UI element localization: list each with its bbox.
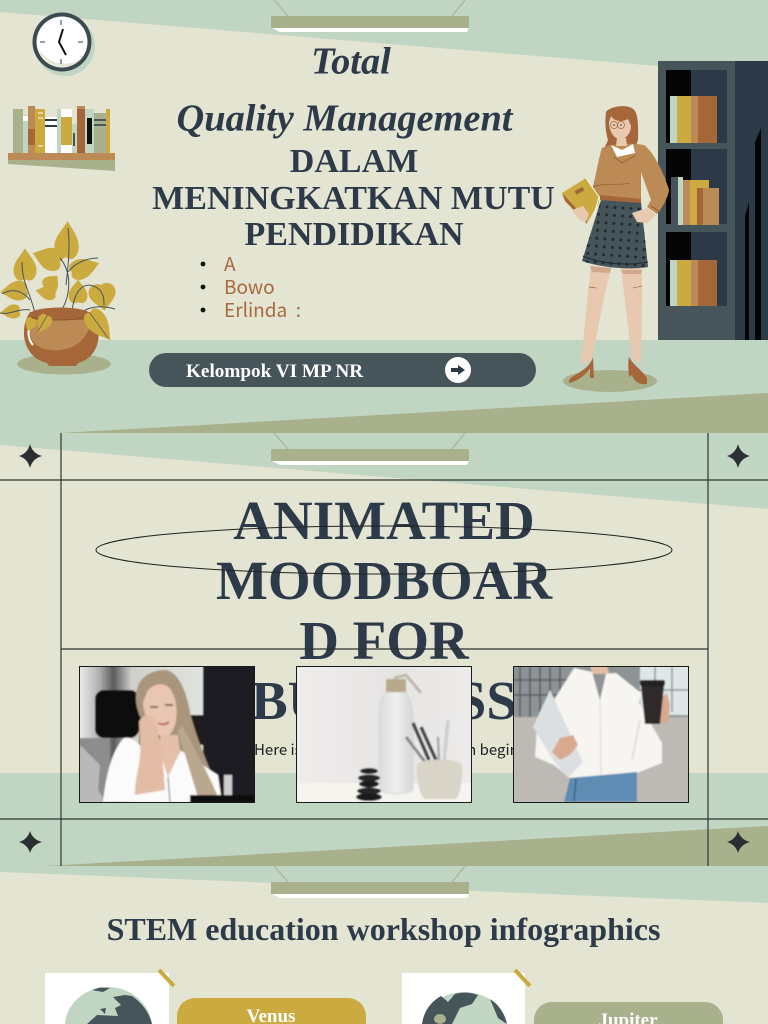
- bookcase: [658, 61, 768, 340]
- heading: Animated Moodboard for Business: ANIMATED: [233, 490, 535, 551]
- author list: A: [224, 250, 236, 277]
- ceiling lamp 3: [271, 866, 469, 898]
- ellipse decoration: [96, 526, 672, 574]
- pill: Venus: [177, 998, 366, 1024]
- title: Total Quality Management: Total: [311, 40, 391, 82]
- button: Kelompok VI MP NR: [149, 353, 536, 387]
- title: Total Quality Management: [177, 40, 514, 140]
- icon: potted plant: [0, 220, 119, 374]
- photo frames: [80, 666, 688, 802]
- heading: Animated Moodboard for Business: [216, 490, 553, 731]
- card: Venus globe: [45, 970, 174, 1024]
- slide 2 background: [0, 433, 768, 866]
- heading: STEM education workshop infographics: STEM education workshop infographics: [107, 911, 660, 947]
- author list: Bowo: [224, 273, 275, 300]
- body text behind photos: Here is where your presentation begins: [254, 739, 526, 760]
- frame grid lines: [0, 433, 768, 866]
- title: Total Quality Management: Quality Management: [177, 98, 514, 140]
- ceiling lamp 2: [271, 433, 469, 465]
- pill: Jupiter: [534, 1002, 723, 1024]
- heading: Animated Moodboard for Business: BUSINESS: [251, 670, 517, 731]
- icon: wall clock: [32, 12, 95, 76]
- illustration: teacher with book: [562, 106, 669, 392]
- subtitle: MENINGKATKAN MUTU: [152, 180, 555, 217]
- ceiling lamp: [271, 0, 469, 32]
- subtitle: [152, 143, 555, 253]
- photo: bottle and pens: [295, 665, 473, 805]
- heading: Animated Moodboard for Business: MOODBOAR: [216, 550, 553, 611]
- subtitle: PENDIDIKAN: [244, 216, 464, 253]
- photo: woman on phone: [78, 665, 256, 805]
- slide 3 background: [0, 866, 768, 1024]
- heading: Animated Moodboard for Business: D FOR: [299, 610, 470, 671]
- button: Kelompok VI MP NR: Kelompok VI MP NR: [186, 361, 364, 382]
- subtitle: DALAM: [290, 143, 418, 180]
- icon: bookshelf with books: [8, 106, 115, 171]
- author list: Erlinda :: [224, 296, 301, 323]
- slide 1 background: [0, 0, 768, 433]
- card: Jupiter globe: [402, 970, 530, 1024]
- photo: woman with coffee: [512, 665, 690, 805]
- sparkle stars: [19, 444, 750, 853]
- author list: [201, 250, 301, 323]
